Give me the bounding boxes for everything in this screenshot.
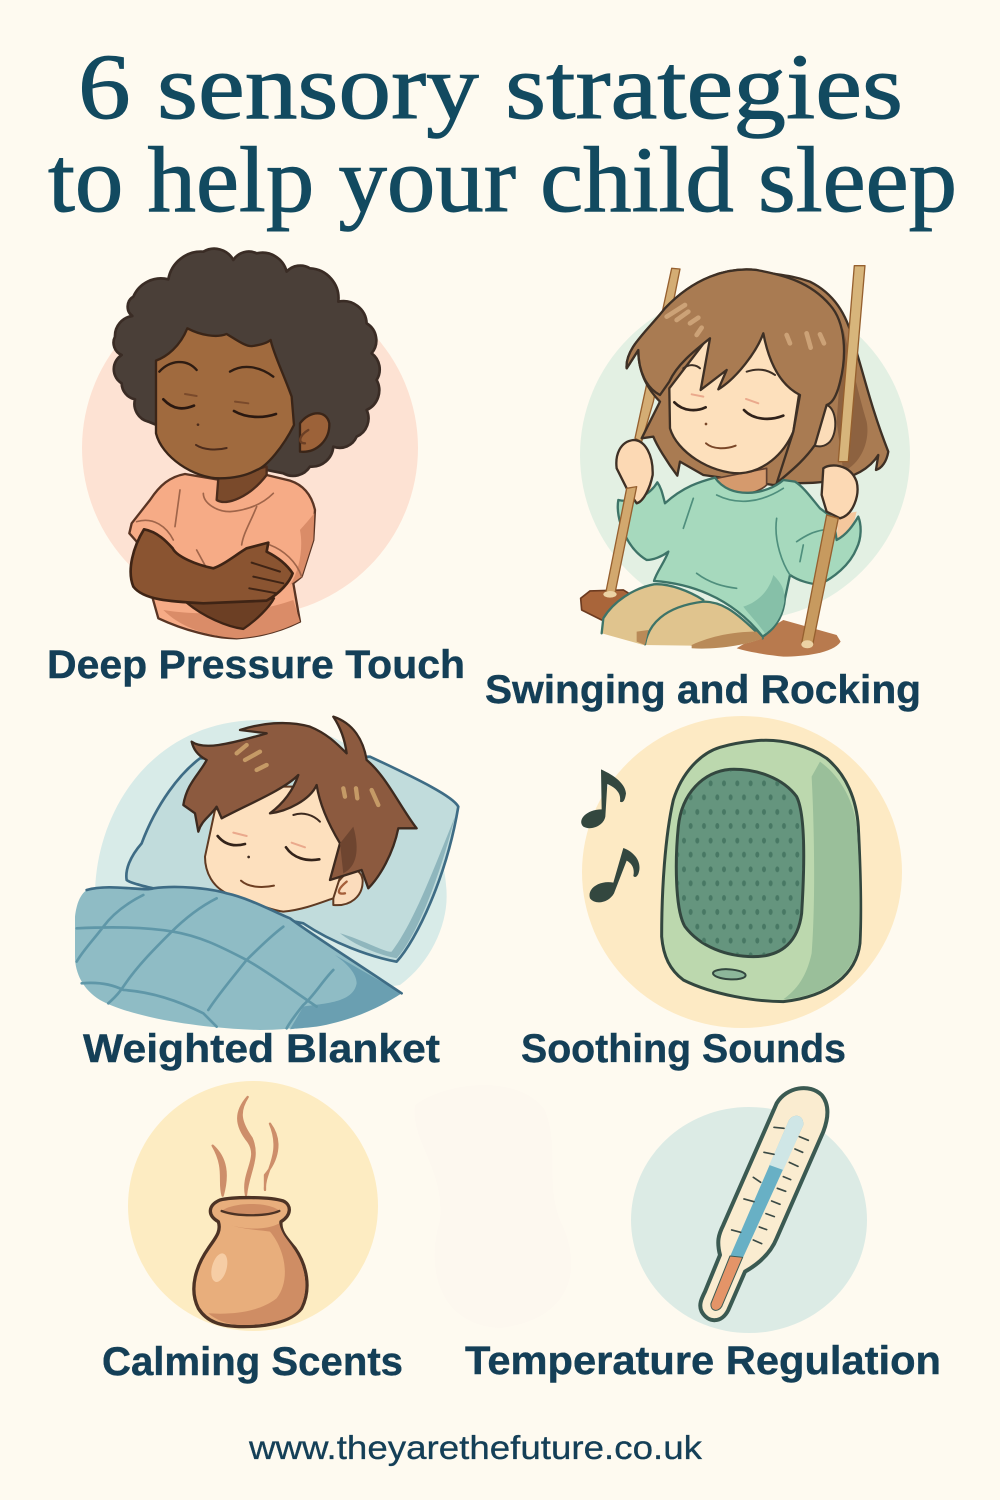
ear	[813, 405, 835, 446]
background circle: pale teal	[631, 1107, 867, 1333]
face	[669, 332, 800, 473]
background circle: yellow	[582, 716, 902, 1028]
ear	[300, 413, 329, 452]
label: calming scents: Calming Scents	[102, 1340, 403, 1384]
background circle: green	[580, 290, 910, 620]
neck	[717, 468, 767, 494]
speaker grille	[676, 769, 804, 957]
music notes	[581, 769, 626, 828]
title: 6 sensory strategies	[78, 36, 903, 139]
thermometer body	[700, 1088, 827, 1320]
shirt	[129, 474, 315, 638]
right rope and hands	[838, 266, 865, 462]
illustration: aroma pot with steam	[194, 1097, 307, 1327]
panel: deep pressure touch	[82, 249, 418, 638]
pot body	[194, 1198, 307, 1327]
panel: swinging and rocking	[580, 266, 910, 657]
panel: weighted blanket	[75, 717, 458, 1030]
hair highlights	[667, 305, 824, 348]
back hair	[627, 269, 888, 485]
crossed arms	[187, 598, 274, 629]
faint background smudge	[415, 1085, 571, 1328]
thermometer ticks	[732, 1127, 808, 1244]
neck	[217, 467, 267, 502]
background circle: yellow	[128, 1081, 378, 1331]
weighted blanket	[75, 887, 402, 1030]
swing seat	[581, 590, 637, 622]
eyebrows, eyes and smile	[683, 365, 775, 375]
panel: calming scents	[128, 1081, 378, 1331]
pot mouth	[222, 1204, 279, 1215]
eyebrow, eyes and smile	[293, 814, 320, 822]
title: to help your child sleep	[48, 129, 957, 232]
thermometer tube	[730, 1116, 803, 1258]
face	[156, 328, 294, 478]
speaker body	[662, 740, 861, 1002]
illustration: sleeping child under blanket	[75, 717, 458, 1030]
panel: soothing sounds	[581, 716, 902, 1028]
illustration: sound machine	[581, 740, 861, 1002]
blanket stitching	[77, 895, 333, 1028]
label: soothing sounds: Soothing Sounds	[521, 1027, 846, 1071]
hair highlights	[237, 745, 378, 805]
label: deep pressure touch: Deep Pressure Touch	[47, 643, 465, 687]
trousers	[602, 584, 763, 647]
left rope upper	[635, 268, 680, 442]
pillow	[126, 757, 458, 962]
background blob: pale teal	[95, 720, 447, 1010]
forearms	[637, 475, 653, 503]
illustration: child on swing	[581, 266, 888, 657]
label: temperature regulation: Temperature Regulation	[465, 1339, 941, 1383]
website url: www.theyarethefuture.co.uk	[248, 1429, 703, 1466]
illustration: thermometer	[700, 1088, 827, 1320]
sweater	[618, 478, 861, 637]
steam	[213, 1097, 277, 1196]
title	[48, 36, 957, 232]
hair	[114, 249, 380, 476]
speaker side shade	[783, 762, 860, 999]
background circle: peach	[82, 280, 418, 616]
speaker button	[713, 968, 746, 980]
ear	[333, 871, 363, 905]
label: weighted blanket: Weighted Blanket	[83, 1027, 440, 1071]
hair	[183, 717, 417, 888]
illustration: child hugging self	[114, 249, 380, 638]
pot shading	[208, 1223, 305, 1325]
eyebrows, eyes and smile	[159, 362, 273, 377]
label: swinging and rocking: Swinging and Rocking	[485, 668, 921, 712]
bangs	[627, 269, 844, 483]
panel: temperature regulation	[631, 1088, 867, 1333]
face	[205, 787, 347, 912]
